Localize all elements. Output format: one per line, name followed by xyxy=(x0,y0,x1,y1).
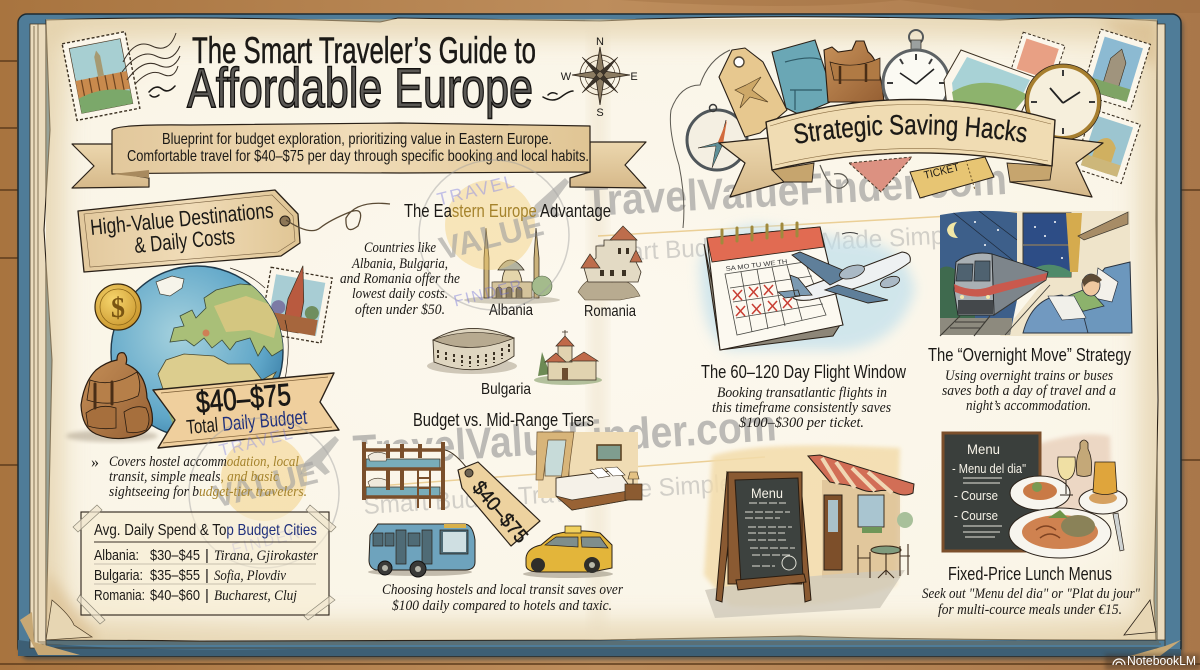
subtitle text: Blueprint for budget exploration, prioritizing value in Eastern Europe. xyxy=(162,131,552,148)
row: Albania xyxy=(94,547,318,564)
block: overnight move text xyxy=(928,344,1132,414)
watermark: lower seal xyxy=(189,418,339,568)
icon: backpack xyxy=(66,353,158,442)
row: Albania: Albania: xyxy=(94,547,139,564)
compass rose: E xyxy=(630,71,638,83)
icon: loop of string under ribbon xyxy=(820,165,848,188)
watermark: upper seal: VALUE xyxy=(436,206,547,267)
tag heading: High-Value Destinations xyxy=(89,197,275,240)
text: budget coverage note: transit, simple meals, and basic xyxy=(109,469,279,485)
text: hostels caption xyxy=(382,582,623,614)
body: night’s accommodation. xyxy=(966,398,1091,414)
watermark: lower domain text xyxy=(352,401,778,520)
carriage interior wall xyxy=(1000,211,1130,336)
label: Romania: Romania xyxy=(584,303,636,320)
row: Bulgaria: | xyxy=(205,567,209,584)
row: Romania: Bucharest, Cluj xyxy=(214,588,297,604)
text: eastern europe description: Albania, Bulgaria, xyxy=(351,256,448,272)
row: Bulgaria: Sofia, Plovdiv xyxy=(214,568,286,584)
watermark: upper seal: TRAVEL xyxy=(435,171,518,210)
icon: awning xyxy=(808,455,914,495)
chalk menu text: Menu xyxy=(967,441,1000,457)
icon: string xyxy=(670,50,730,228)
icon: airplane xyxy=(778,232,910,303)
watercolor sky xyxy=(700,225,915,350)
text: budget coverage note xyxy=(91,454,307,500)
row: Bulgaria xyxy=(94,567,286,584)
icon: dollar coin: $ xyxy=(111,293,125,324)
row: Albania: $30–$45 xyxy=(150,547,200,564)
heading: Fixed-Price Lunch Menus xyxy=(948,563,1112,584)
block: fixed-price lunch text xyxy=(922,563,1141,618)
icon: train xyxy=(940,253,1050,336)
backdrop wash xyxy=(1035,434,1112,520)
body xyxy=(922,586,1141,618)
table heading: Avg. Daily Spend & Top Budget Cities xyxy=(94,522,317,539)
icon: small plate xyxy=(1010,476,1070,510)
icon: bistro table xyxy=(858,544,910,578)
watermark: upper seal: FINDER xyxy=(452,277,526,311)
postage stamp: left building xyxy=(62,32,140,120)
watermark: lower seal: TRAVEL xyxy=(217,423,296,460)
icon: hotel room xyxy=(536,432,642,510)
icon: postcard xyxy=(944,50,1037,115)
icon: price tag xyxy=(445,450,540,548)
compass rose: N xyxy=(596,36,604,48)
watermark: upper domain text: Smart Budget Travel Made Simple xyxy=(593,221,964,268)
icon: price tag: $40–$75 xyxy=(468,477,532,548)
icon: oil jar xyxy=(1093,462,1117,494)
icon: a-frame menu board xyxy=(716,472,811,602)
icon: bottom pink stamp xyxy=(849,157,912,192)
flight window illustration xyxy=(700,223,915,350)
watermark: upper seal xyxy=(419,160,569,311)
icon: pepper mill xyxy=(1076,440,1092,476)
night scene xyxy=(940,210,1017,335)
budget figure: $40–$75 xyxy=(195,377,292,420)
icon: wine glass xyxy=(1058,457,1075,495)
icon: chalkboard xyxy=(943,433,1040,551)
title line 1: The Smart Traveler’s Guide to xyxy=(192,30,536,71)
icon: colosseum xyxy=(427,328,517,374)
icon: taxi xyxy=(523,526,613,578)
icon: mosque, Albania xyxy=(464,228,560,304)
text: budget coverage note: Covers hostel accommodation, local xyxy=(109,454,299,470)
body: this timeframe consistently saves xyxy=(712,400,891,416)
text: hostels caption: $100 daily compared to hotels and taxic. xyxy=(392,598,612,614)
heading: budget vs mid-range tiers: Budget vs. Mid-Range Tiers xyxy=(413,409,594,430)
title xyxy=(149,30,573,119)
heading: the eastern europe advantage: The Eastern Europe Advantage xyxy=(404,200,611,221)
body xyxy=(712,385,891,431)
body: Booking transatlantic flights in xyxy=(717,385,887,401)
icon: main plate xyxy=(1009,508,1111,558)
watermark: upper domain text: TravelValueFinder.com xyxy=(584,155,1008,226)
text: eastern europe description xyxy=(340,240,461,318)
icon: ticket: TICKET xyxy=(923,161,961,182)
icon: lower stamp xyxy=(1074,109,1140,184)
subtitle banner: Comfortable travel for $40–$75 per day through specific booking and local habits. xyxy=(127,148,589,165)
postmark wavy lines xyxy=(122,33,180,84)
icon: chalkboard: - Course xyxy=(954,488,998,503)
icon: blue wallet xyxy=(772,40,835,115)
body: for multi-cource meals under €15. xyxy=(938,602,1122,618)
icon: brown backpack xyxy=(824,41,884,102)
icon: calendar xyxy=(704,223,843,350)
overnight train illustration xyxy=(938,208,1132,338)
label: Bulgaria: Bulgaria xyxy=(481,381,531,398)
notebooklm badge xyxy=(1105,653,1200,670)
table: average daily spend xyxy=(73,505,336,624)
row: Romania: | xyxy=(205,587,209,604)
section tag: high-value destinations: & Daily Costs xyxy=(133,223,236,258)
body: $100–$300 per ticket. xyxy=(739,415,864,431)
board heading: Menu xyxy=(751,485,783,501)
watermark: lower domain text: TravelValueFinder.com xyxy=(352,401,778,476)
ribbon: strategic saving hacks xyxy=(718,98,1104,198)
block: flight window text xyxy=(701,361,907,431)
icon: calendar: SA MO TU WE TH xyxy=(725,258,788,273)
row: Romania xyxy=(94,587,297,604)
watermark: lower seal: FINDER xyxy=(230,525,304,559)
icon: dollar coin xyxy=(95,284,141,330)
row: Albania: Tirana, Gjirokaster xyxy=(214,548,318,564)
icon: ticket xyxy=(910,157,994,198)
eastern europe landmarks xyxy=(427,226,642,398)
icon: stamp with cathedral xyxy=(260,260,333,343)
icon: bus xyxy=(368,524,475,577)
body xyxy=(942,368,1116,414)
icon: compass xyxy=(687,104,747,170)
collage of travel objects xyxy=(670,29,1150,228)
budget vs mid-range illustrations xyxy=(362,432,642,578)
section tag: high-value destinations xyxy=(78,190,390,272)
text: budget coverage note: sightseeing for budget-tier travelers. xyxy=(109,484,307,500)
text: budget coverage note: » xyxy=(91,454,99,471)
icon: knife xyxy=(1113,513,1124,551)
subtitle banner xyxy=(72,123,646,188)
icon: luggage tag xyxy=(719,48,787,137)
compass rose: W xyxy=(561,71,572,83)
notebooklm badge: NotebookLM xyxy=(1127,653,1196,668)
watermark: lower seal: VALUE xyxy=(210,454,321,515)
heading: The 60–120 Day Flight Window xyxy=(701,361,907,382)
row: Romania: Romania: xyxy=(94,587,145,604)
icon: globe xyxy=(111,266,290,440)
icon: stopwatch xyxy=(883,30,949,116)
row: Bulgaria: Bulgaria: xyxy=(94,567,143,584)
icon: orthodox church xyxy=(534,330,602,385)
icon: side plate xyxy=(1079,488,1127,514)
icon: chalkboard: - Menu del dia" xyxy=(952,461,1026,476)
lunch menu illustration xyxy=(943,433,1127,558)
watermark: upper domain text xyxy=(584,155,1020,268)
icon: pink stamp upper xyxy=(1010,32,1065,86)
watermark: lower domain text: Smart Budget Travel Made Simple xyxy=(363,469,734,520)
text: eastern europe description: often under $50. xyxy=(355,302,445,318)
title flourishes xyxy=(149,86,573,100)
row: Romania: $40–$60 xyxy=(150,587,200,604)
globe with coin, stamp and backpack xyxy=(66,260,333,442)
icon: bunk bed xyxy=(362,442,445,510)
icon: blue stamp tower xyxy=(1081,29,1150,109)
heading: The “Overnight Move” Strategy xyxy=(928,344,1132,365)
title line 2: Affordable Europe xyxy=(187,56,533,119)
body: Seek out "Menu del dia" or "Plat du jour" xyxy=(922,586,1141,602)
icon: gold clock xyxy=(1025,64,1101,140)
icon: sleeping passenger xyxy=(1023,262,1132,333)
train window xyxy=(1023,212,1128,277)
icon: castle, Romania xyxy=(578,226,642,300)
row: Bulgaria: $35–$55 xyxy=(150,567,200,584)
icon: chalkboard: - Course xyxy=(954,508,998,523)
cafe illustration xyxy=(704,445,914,618)
building xyxy=(704,445,900,607)
text: eastern europe description: and Romania offer the xyxy=(340,271,461,287)
budget caption: Total Daily Budget xyxy=(186,406,308,439)
body: saves both a day of travel and a xyxy=(942,383,1116,399)
compass rose: S xyxy=(596,107,604,119)
compass rose xyxy=(561,36,638,119)
ribbon: total daily budget xyxy=(153,373,339,448)
ribbon heading: Strategic Saving Hacks xyxy=(794,114,1027,144)
row: Albania: | xyxy=(205,547,209,564)
label: Albania: Albania xyxy=(489,302,533,319)
text: eastern europe description: Countries like xyxy=(364,240,436,256)
body: Using overnight trains or buses xyxy=(945,368,1113,384)
text: hostels caption: Choosing hostels and local transit saves over xyxy=(382,582,623,598)
text: eastern europe description: lowest daily costs. xyxy=(352,286,448,302)
